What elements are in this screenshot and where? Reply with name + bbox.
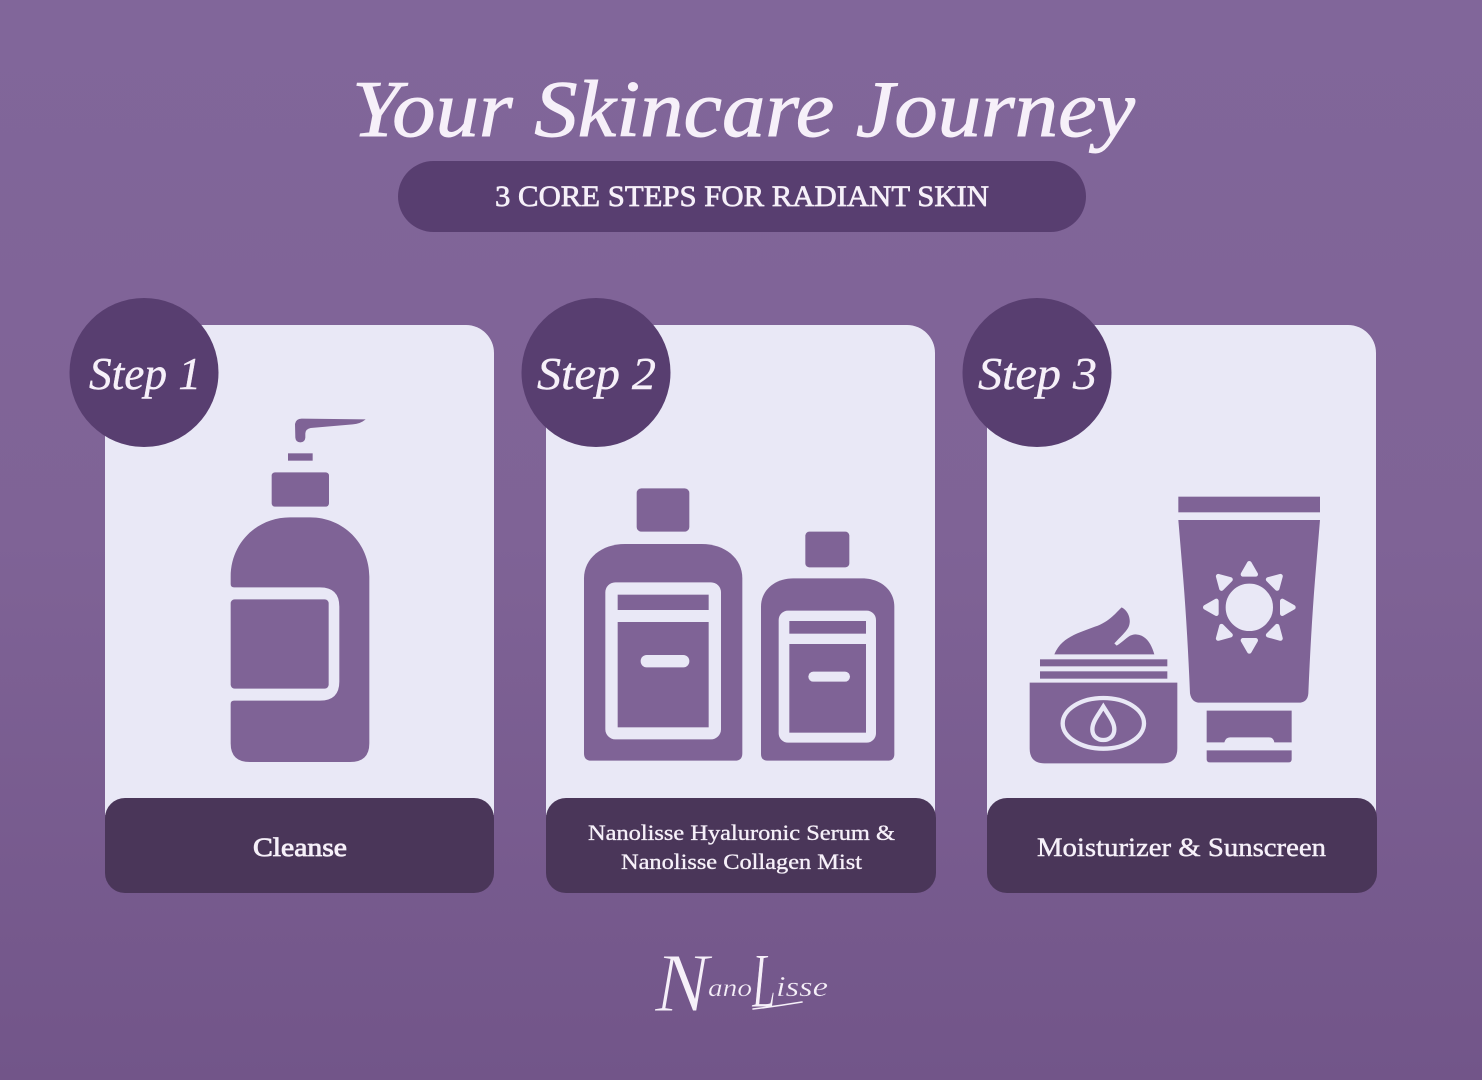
panel: step 3 moisturizer and sunscreen	[962, 298, 1377, 893]
label bar: cleanse: Cleanse	[253, 833, 347, 862]
icon: pump bottle	[231, 419, 369, 762]
label bar: cleanse	[105, 798, 494, 893]
step 3 badge	[962, 298, 1112, 447]
logo: NanoLisse: ano	[708, 975, 752, 1002]
step 3 badge: Step 3	[978, 348, 1097, 399]
panel: step 2 serum and mist	[522, 298, 936, 893]
logo: NanoLisse: isse	[776, 972, 828, 1003]
panel: step 1 cleanse	[70, 298, 494, 893]
logo: NanoLisse	[654, 937, 828, 1030]
label bar: moisturizer and sunscreen	[987, 798, 1377, 893]
label bar: moisturizer and sunscreen: Moisturizer & Sunscreen	[1037, 833, 1326, 862]
subtitle pill: 3 CORE STEPS FOR RADIANT SKIN	[495, 180, 989, 213]
icon: two bottles	[584, 488, 894, 761]
label bar: serum and mist: Nanolisse Collagen Mist	[621, 849, 863, 874]
title: Your Skincare Journey	[352, 66, 1136, 154]
step 1 badge: Step 1	[89, 348, 201, 399]
logo: NanoLisse: N	[654, 937, 713, 1030]
step 1 badge	[70, 298, 218, 447]
card 1 background	[105, 325, 494, 815]
logo: NanoLisse: L	[751, 937, 776, 1024]
label bar: serum and mist	[546, 798, 936, 893]
card 2 background	[546, 325, 935, 815]
card 3 background	[987, 325, 1376, 815]
subtitle pill	[398, 161, 1086, 232]
step 2 badge	[522, 298, 670, 447]
label bar: serum and mist: Nanolisse Hyaluronic Serum &	[588, 820, 896, 845]
icon: cream jar and sunscreen tube	[1030, 497, 1320, 763]
step 2 badge: Step 2	[537, 348, 656, 399]
